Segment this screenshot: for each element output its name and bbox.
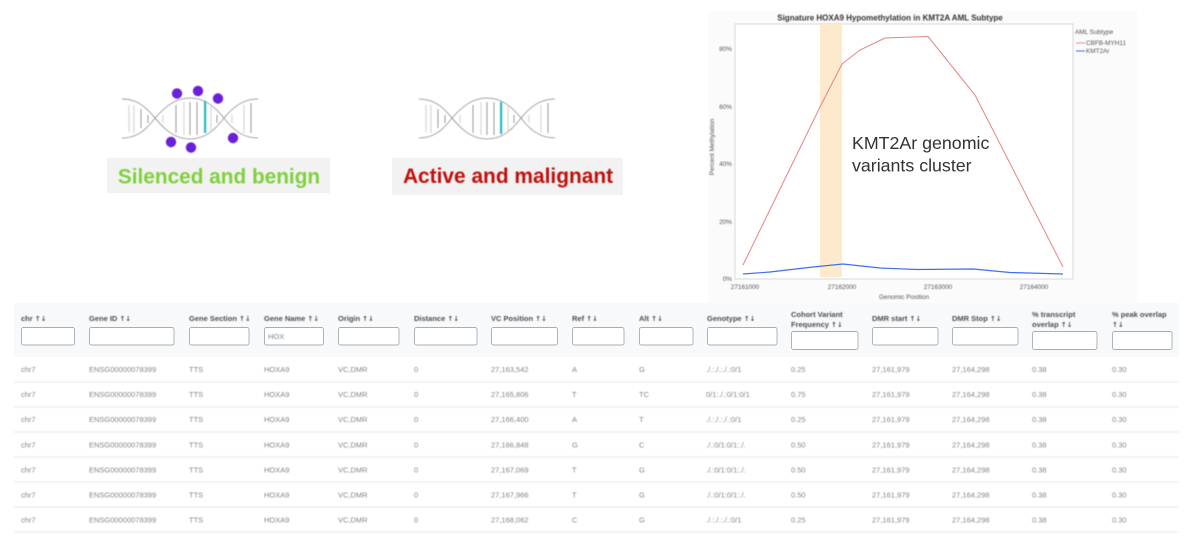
row 4: 27,166,848 [491, 440, 529, 450]
row 3: ./.:./.:./.:0/1 [706, 415, 741, 424]
row 7: 0.38 [1032, 516, 1047, 524]
row 4: TTS [189, 440, 203, 450]
row 6: 0.30 [1112, 490, 1127, 500]
row 3: 0.25 [791, 415, 806, 424]
line: KMT2Ar [743, 264, 1063, 274]
legend: AML Subtype [1075, 29, 1114, 36]
row 7: TTS [189, 516, 203, 524]
legend: CBFB-MYH11 [1086, 40, 1126, 47]
row 4: C [639, 440, 645, 450]
table header: VC Position ↑↓ [491, 314, 547, 323]
line: CBFB-MYH11 [743, 36, 1063, 267]
row 4: 0 [414, 440, 418, 450]
table header: Gene ID ↑↓ [89, 314, 131, 323]
row 1: 27,164,298 [952, 365, 990, 374]
row 7 [14, 516, 1179, 532]
row 5: T [572, 466, 577, 474]
x axis labels: 27164000 [1020, 284, 1049, 291]
row 5 [14, 466, 1179, 482]
row 7: ./.:./.:./.:0/1 [706, 516, 741, 524]
x axis title: Genomic Position [879, 294, 929, 301]
icon: unmethylated DNA helix [419, 98, 555, 139]
row 2: HOXA9 [264, 390, 289, 399]
row 2: 0.30 [1112, 390, 1127, 399]
y axis labels: 20% [719, 219, 732, 226]
x axis labels: 27162000 [828, 284, 857, 291]
row 1: 27,163,542 [491, 365, 529, 374]
row 6: ./.:0/1:0/1:./. [706, 490, 746, 500]
label: active and malignant [392, 158, 623, 195]
row 3: 27,166,400 [491, 415, 529, 424]
row 1: HOXA9 [264, 365, 289, 374]
table header: HOX [268, 332, 284, 341]
row 6 [14, 490, 1179, 507]
row 7: 0 [414, 516, 418, 524]
label: silenced and benign: Silenced and benign [118, 166, 320, 188]
row 5: 27,167,069 [491, 466, 529, 474]
row 5: HOXA9 [264, 466, 289, 474]
row 5: 0.30 [1112, 466, 1127, 474]
row 7: 0.30 [1112, 516, 1127, 524]
row 6: 0 [414, 490, 418, 500]
label: silenced and benign [107, 158, 330, 193]
row 6: G [639, 490, 645, 500]
plot area [735, 24, 1073, 279]
label: active and malignant: Active and malignant [403, 165, 613, 188]
table header: % transcript [1032, 310, 1076, 319]
annotation: variants cluster: variants cluster [852, 156, 972, 176]
x axis labels: 27163000 [924, 284, 953, 291]
row 1: 0.30 [1112, 365, 1127, 374]
row 2: T [572, 390, 577, 399]
row 2: 27,164,298 [952, 390, 990, 399]
row 3: ENSG00000078399 [89, 415, 156, 424]
table header: DMR Stop ↑↓ [952, 314, 1002, 323]
row 1: G [639, 365, 645, 374]
row 4: chr7 [21, 440, 36, 450]
row 4: 27,161,979 [872, 440, 910, 450]
row 2: chr7 [21, 390, 36, 399]
y axis labels: 0% [723, 276, 732, 283]
row 2: 27,161,979 [872, 390, 910, 399]
table header: DMR start ↑↓ [872, 314, 921, 323]
row 4: G [572, 440, 578, 450]
table header: Ref ↑↓ [572, 314, 598, 323]
table header: Genotype ↑↓ [707, 314, 755, 323]
legend: KMT2Ar [1086, 48, 1110, 55]
row 7: 0.25 [791, 516, 806, 524]
row 3: TTS [189, 415, 203, 424]
table header [14, 303, 1179, 357]
row 3 [14, 415, 1179, 432]
table header: Cohort Variant [791, 310, 843, 319]
row 6: TTS [189, 490, 203, 500]
row 3: T [639, 415, 644, 424]
row 3: HOXA9 [264, 415, 289, 424]
row 7: 27,161,979 [872, 516, 910, 524]
row 2 [14, 390, 1179, 407]
row 5: G [639, 466, 645, 474]
icon: methylated DNA helix [122, 86, 258, 153]
row 4: 0.50 [791, 440, 806, 450]
row 7: ENSG00000078399 [89, 516, 156, 524]
table header: Gene Name ↑↓ [264, 314, 319, 323]
row 4: 27,164,298 [952, 440, 990, 450]
row 2: 0 [414, 390, 418, 399]
y axis title: Percent Methylation [709, 118, 716, 175]
highlighted variant cluster band [820, 24, 842, 277]
table header: overlap ↑↓ [1032, 320, 1072, 329]
row 2: VC,DMR [338, 390, 368, 399]
chart title: Signature HOXA9 Hypomethylation in KMT2A AML Subtype [777, 14, 1003, 22]
legend [1075, 29, 1126, 55]
row 2: TC [639, 390, 650, 399]
row 5: 0 [414, 466, 418, 474]
row 5: ./.:0/1:0/1:./. [706, 466, 746, 474]
row 4 [14, 440, 1179, 457]
row 1: TTS [189, 365, 203, 374]
row 6: 27,164,298 [952, 490, 990, 500]
row 1: VC,DMR [338, 365, 368, 374]
row 4: 0.38 [1032, 440, 1047, 450]
row 7: HOXA9 [264, 516, 289, 524]
y axis labels: 80% [719, 46, 732, 53]
row 6: HOXA9 [264, 490, 289, 500]
y axis labels: 40% [719, 161, 732, 168]
row 2: 0.38 [1032, 390, 1047, 399]
row 5: ENSG00000078399 [89, 466, 156, 474]
table header: Alt ↑↓ [639, 314, 663, 323]
row 4: ./.:0/1:0/1:./. [706, 440, 746, 450]
row 3: VC,DMR [338, 415, 368, 424]
table header: % peak overlap [1112, 310, 1167, 319]
row 3: 27,164,298 [952, 415, 990, 424]
row 4: VC,DMR [338, 440, 368, 450]
row 1 [14, 365, 1179, 382]
row 6: 0.50 [791, 490, 806, 500]
row 1: 27,161,979 [872, 365, 910, 374]
row 7: 27,168,062 [491, 516, 529, 524]
x axis labels: 27161000 [731, 284, 760, 291]
row 3: 27,161,979 [872, 415, 910, 424]
row 2: 0/1:./.:0/1:0/1 [706, 390, 750, 399]
row 4: HOXA9 [264, 440, 289, 450]
annotation: variants cluster: KMT2Ar genomic [852, 133, 989, 153]
row 3: 0 [414, 415, 418, 424]
row 4: ENSG00000078399 [89, 440, 156, 450]
row 5: 0.38 [1032, 466, 1047, 474]
row 2: ENSG00000078399 [89, 390, 156, 399]
row 5: 27,161,979 [872, 466, 910, 474]
row 5: chr7 [21, 466, 36, 474]
row 3: 0.38 [1032, 415, 1047, 424]
row 7: G [639, 516, 645, 524]
row 1: chr7 [21, 365, 36, 374]
y axis labels: 60% [719, 104, 732, 111]
y axis labels [719, 46, 732, 283]
row 6: chr7 [21, 490, 36, 500]
row 1: ENSG00000078399 [89, 365, 156, 374]
row 5: 27,164,298 [952, 466, 990, 474]
chart: HOXA9 methylation line chart [708, 11, 1137, 303]
row 6: T [572, 490, 577, 500]
table header: Distance ↑↓ [414, 314, 459, 323]
table header: ↑↓ [1112, 321, 1124, 329]
row 6: 27,161,979 [872, 490, 910, 500]
table header: Gene Section ↑↓ [189, 314, 251, 323]
x axis labels [731, 284, 1049, 291]
row 7: 27,164,298 [952, 516, 990, 524]
row 6: ENSG00000078399 [89, 490, 156, 500]
row 1: A [572, 365, 577, 374]
row 5: 0.50 [791, 466, 806, 474]
row 3: chr7 [21, 415, 36, 424]
row 6: 27,167,966 [491, 490, 529, 500]
table header: Frequency ↑↓ [791, 320, 843, 329]
row 3: A [572, 415, 577, 424]
row 1: 0 [414, 365, 418, 374]
row 5: VC,DMR [338, 466, 368, 474]
row 2: 27,165,806 [491, 390, 529, 399]
row 1: 0.25 [791, 365, 806, 374]
row 7: chr7 [21, 516, 36, 524]
table: genomic variants [14, 303, 1179, 532]
row 6: 0.38 [1032, 490, 1047, 500]
row 4: 0.30 [1112, 440, 1127, 450]
table header: chr ↑↓ [21, 314, 46, 323]
row 3: 0.30 [1112, 415, 1127, 424]
row 2: TTS [189, 390, 203, 399]
row 2: 0.75 [791, 390, 806, 399]
row 7: C [572, 516, 578, 524]
row 7: VC,DMR [338, 516, 368, 524]
table header: Origin ↑↓ [338, 314, 374, 323]
row 1: ./.:./.:./.:0/1 [706, 365, 741, 374]
row 1: 0.38 [1032, 365, 1047, 374]
row 5: TTS [189, 466, 203, 474]
row 6: VC,DMR [338, 490, 368, 500]
